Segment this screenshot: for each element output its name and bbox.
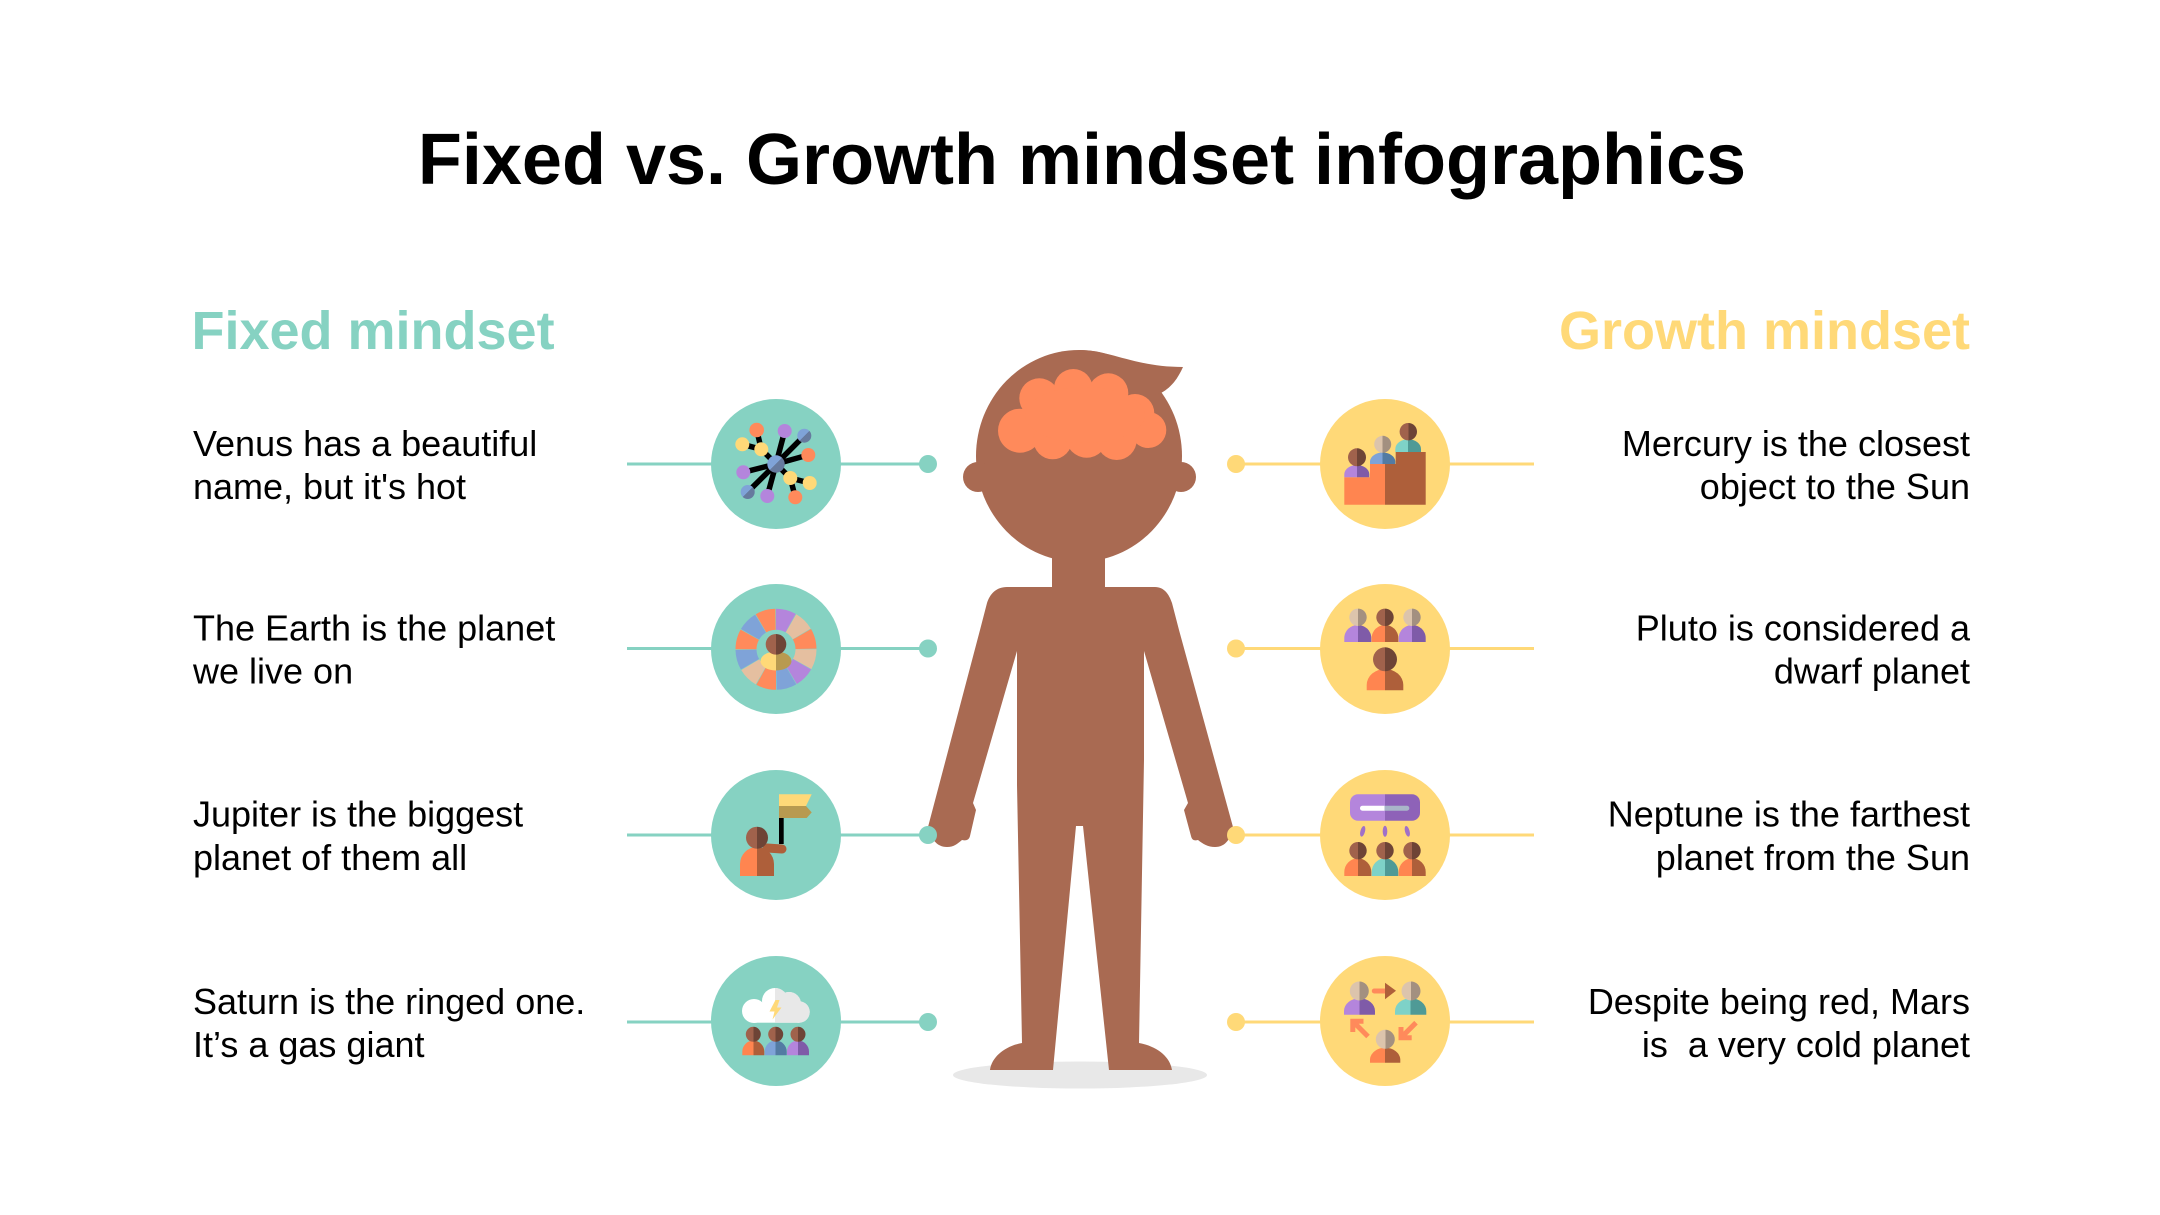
text: Venus: Venus has a beautiful (193, 423, 537, 464)
icon: network of nodes (711, 399, 841, 529)
text: Pluto: dwarf planet (1774, 650, 1970, 692)
text: Pluto: Pluto is considered a (1636, 608, 1971, 648)
text: Jupiter: planet of them all (193, 837, 467, 878)
figure shadow (953, 1062, 1207, 1088)
icon: three people with cycle arrows (1320, 956, 1450, 1086)
brain (998, 369, 1166, 460)
human figure (928, 350, 1233, 1088)
text: Venus: name, but it's hot (193, 466, 466, 507)
icon: group under storm cloud (711, 956, 841, 1086)
text: Earth: The Earth is the planet (193, 608, 555, 648)
text: Neptune: planet from the Sun (1656, 837, 1970, 878)
icon: person holding flag (711, 770, 841, 900)
heading: Fixed mindset: Fixed mindset (192, 301, 555, 361)
text: Mars: is a very cold planet (1642, 1024, 1970, 1065)
title: Fixed vs. Growth mindset infographics (418, 120, 1746, 200)
text: Saturn: Saturn is the ringed one. (193, 981, 585, 1022)
text: Saturn: It’s a gas giant (193, 1024, 424, 1065)
figure body (928, 350, 1233, 1070)
text: Mercury: object to the Sun (1700, 466, 1970, 507)
icon: people on podium steps (1320, 399, 1450, 529)
text: Mars: Despite being red, Mars (1588, 981, 1970, 1022)
icon: group under message panel (1320, 770, 1450, 900)
heading: Growth mindset: Growth mindset (1559, 301, 1970, 361)
text: Mercury: Mercury is the closest (1622, 423, 1970, 464)
icon: leader facing group (1320, 584, 1450, 714)
connector lines: Fixed side (627, 455, 937, 1031)
icon: color wheel with person (711, 584, 841, 714)
text: Earth: we live on (192, 650, 353, 692)
connector lines: Growth side (1227, 455, 1534, 1031)
text: Jupiter: Jupiter is the biggest (193, 794, 523, 834)
text: Neptune: Neptune is the farthest (1608, 794, 1970, 834)
